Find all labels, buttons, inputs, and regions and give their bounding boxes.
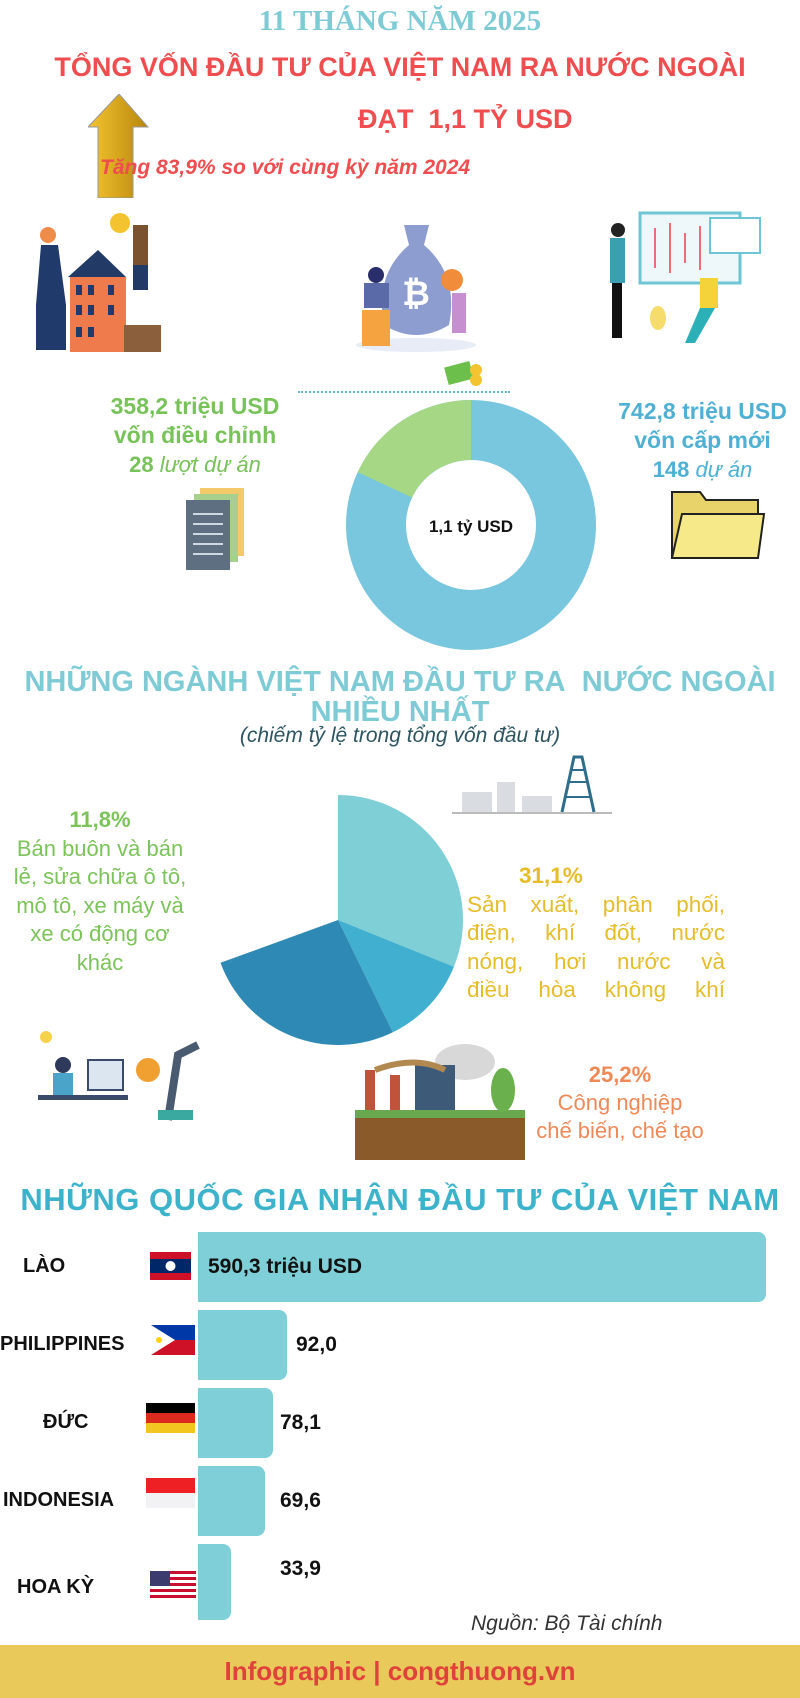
text: energy 31,1%: 31,1% bbox=[519, 863, 583, 888]
text: new capital bbox=[618, 398, 787, 482]
section heading: industries bbox=[24, 665, 776, 728]
text: new capital: vốn cấp mới bbox=[634, 427, 771, 453]
illustration: money bag bitcoin: ₿ bbox=[402, 275, 430, 313]
bar: Lào: 590,3 triệu USD bbox=[208, 1255, 362, 1278]
footer banner bbox=[0, 1645, 800, 1698]
text: energy 31,1% bbox=[467, 863, 725, 1002]
donut chart: total 1,1 tỷ USD bbox=[346, 400, 596, 650]
text: energy 31,1%: điều hòa không khí bbox=[467, 977, 725, 1002]
bar: Indonesia bbox=[3, 1466, 321, 1536]
text: energy 31,1%: nóng, hơi nước và bbox=[467, 948, 725, 974]
text: wholesale retail 11,8%: xe có động cơ bbox=[30, 921, 170, 946]
icon: cash stack bbox=[444, 361, 482, 386]
text: wholesale retail 11,8% bbox=[14, 807, 186, 974]
text: wholesale retail 11,8%: mô tô, xe máy và bbox=[16, 892, 184, 918]
bar: Lào bbox=[23, 1232, 766, 1302]
title: year: 11 THÁNG NĂM 2025 bbox=[259, 5, 541, 37]
text: wholesale retail 11,8%: Bán buôn và bán bbox=[17, 836, 183, 860]
bar: Hoa Kỳ: 33,9 bbox=[280, 1557, 321, 1580]
title: main heading: TỔNG VỐN ĐẦU TƯ CỦA VIỆT NAM RA NƯỚC NGOÀI bbox=[54, 52, 746, 82]
bar: Đức: ĐỨC bbox=[43, 1411, 88, 1433]
text: wholesale retail 11,8%: lẻ, sửa chữa ô tô, bbox=[14, 864, 186, 889]
bar: Indonesia: 69,6 bbox=[280, 1489, 321, 1512]
text: adjusted capital: 358,2 triệu USD bbox=[111, 393, 279, 419]
bar: Indonesia: INDONESIA bbox=[3, 1489, 114, 1511]
icon: gold up arrow bbox=[88, 94, 149, 198]
text: energy 31,1%: Sản xuất, phân phối, bbox=[467, 892, 725, 916]
text: adjusted capital bbox=[111, 393, 279, 477]
text: manufacturing 25,2%: 25,2% bbox=[589, 1062, 651, 1087]
section heading: industries: NHIỀU NHẤT bbox=[311, 696, 489, 728]
illustration: factory and land bbox=[355, 1044, 525, 1160]
headline value: ĐẠT 1,1 TỶ USD bbox=[358, 104, 573, 134]
dotted divider bbox=[298, 391, 510, 393]
bar: Philippines: 92,0 bbox=[296, 1333, 337, 1356]
illustration: engineer and robot bbox=[38, 1031, 200, 1121]
text: adjusted capital: vốn điều chỉnh bbox=[114, 422, 276, 448]
bar: Lào: LÀO bbox=[23, 1255, 65, 1277]
icon: folder bbox=[670, 491, 766, 559]
text: wholesale retail 11,8%: 11,8% bbox=[69, 807, 131, 832]
icon: oil rig industrial bbox=[452, 756, 612, 814]
bar chart: countries bbox=[0, 1232, 766, 1620]
text: new capital: 742,8 triệu USD bbox=[618, 398, 787, 424]
pie chart: industries bbox=[220, 795, 463, 1045]
text: manufacturing 25,2%: chế biến, chế tạo bbox=[536, 1118, 704, 1143]
bar: Philippines: PHILIPPINES bbox=[0, 1333, 124, 1355]
bar: Đức bbox=[43, 1388, 321, 1458]
source note: Nguồn: Bộ Tài chính bbox=[471, 1612, 662, 1635]
text: adjusted capital: 28 lượt dự án bbox=[129, 452, 261, 477]
text: manufacturing 25,2% bbox=[536, 1062, 704, 1143]
text: wholesale retail 11,8%: khác bbox=[77, 950, 123, 974]
bar: Philippines bbox=[0, 1310, 337, 1380]
footer banner: Infographic | congthuong.vn bbox=[224, 1656, 576, 1686]
bar: Đức: 78,1 bbox=[280, 1411, 321, 1434]
text: new capital: 148 dự án bbox=[653, 457, 752, 482]
section heading: industries: NHỮNG NGÀNH VIỆT NAM ĐẦU TƯ RA NƯỚC NGOÀI bbox=[24, 666, 776, 698]
section heading: countries: NHỮNG QUỐC GIA NHẬN ĐẦU TƯ CỦA VIỆT NAM bbox=[20, 1182, 780, 1217]
bar: Hoa Kỳ: HOA KỲ bbox=[17, 1576, 94, 1598]
icon: documents bbox=[186, 488, 244, 570]
illustration: money bag bitcoin bbox=[356, 225, 476, 352]
bar: Hoa Kỳ bbox=[17, 1544, 321, 1620]
subtitle: (chiếm tỷ lệ trong tổng vốn đầu tư) bbox=[240, 724, 560, 747]
text: energy 31,1%: điện, khí đốt, nước bbox=[467, 920, 725, 945]
illustration: people with charts bbox=[610, 212, 761, 343]
text: manufacturing 25,2%: Công nghiệp bbox=[558, 1090, 682, 1115]
illustration: house and people bbox=[36, 213, 161, 352]
donut chart: total 1,1 tỷ USD: 1,1 tỷ USD bbox=[429, 517, 513, 536]
growth note: Tăng 83,9% so với cùng kỳ năm 2024 bbox=[100, 156, 470, 179]
